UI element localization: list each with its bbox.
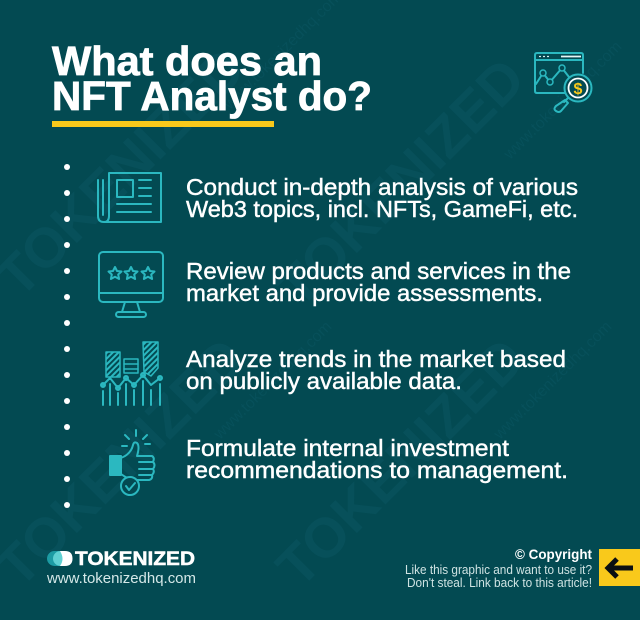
text: item 2: market and provide assessments. [186, 280, 543, 306]
website url: www.tokenizedhq.com [46, 570, 196, 587]
text: TOKENIZED [264, 46, 537, 318]
text: www.tokenizedhq.com [210, 318, 335, 444]
arrow badge [599, 549, 640, 586]
text: item 3 [186, 346, 566, 394]
icon: monitor with stars [99, 252, 163, 317]
icon: newspaper [98, 173, 161, 222]
icon: analytics browser with magnifier [535, 53, 592, 112]
text: item 1: Conduct in-depth analysis of various [186, 174, 578, 200]
icon: thumbs up with check [110, 430, 154, 495]
text: item 1: Web3 topics, incl. NFTs, GameFi, etc. [186, 196, 578, 222]
title [52, 38, 372, 119]
text: item 4: Formulate internal investment [186, 435, 510, 461]
text: item 4: recommendations to management. [186, 457, 568, 483]
timeline dots [64, 164, 70, 508]
icon: analytics browser with magnifier: $ [574, 81, 583, 98]
text: item 3: on publicly available data. [186, 368, 462, 394]
copyright notice: © Copyright [515, 546, 592, 562]
text: item 4 [186, 435, 568, 483]
logo: TOKENIZED [75, 549, 195, 570]
text: item 2: Review products and services in the [186, 258, 571, 284]
text: www.tokenizedhq.com [490, 318, 615, 444]
copyright notice [405, 546, 592, 590]
title underline [52, 121, 274, 127]
text: item 2 [186, 258, 571, 306]
title: What does an [52, 38, 322, 84]
icon: bar and trend chart [101, 342, 162, 405]
text: item 3: Analyze trends in the market based [186, 346, 566, 372]
copyright notice: Like this graphic and want to use it? [405, 562, 592, 577]
title: NFT Analyst do? [52, 73, 372, 119]
text: www.tokenizedhq.com [500, 38, 625, 164]
text: TOKENIZED [264, 326, 537, 598]
copyright notice: Don't steal. Link back to this article! [407, 575, 592, 590]
text: item 1 [186, 174, 578, 222]
